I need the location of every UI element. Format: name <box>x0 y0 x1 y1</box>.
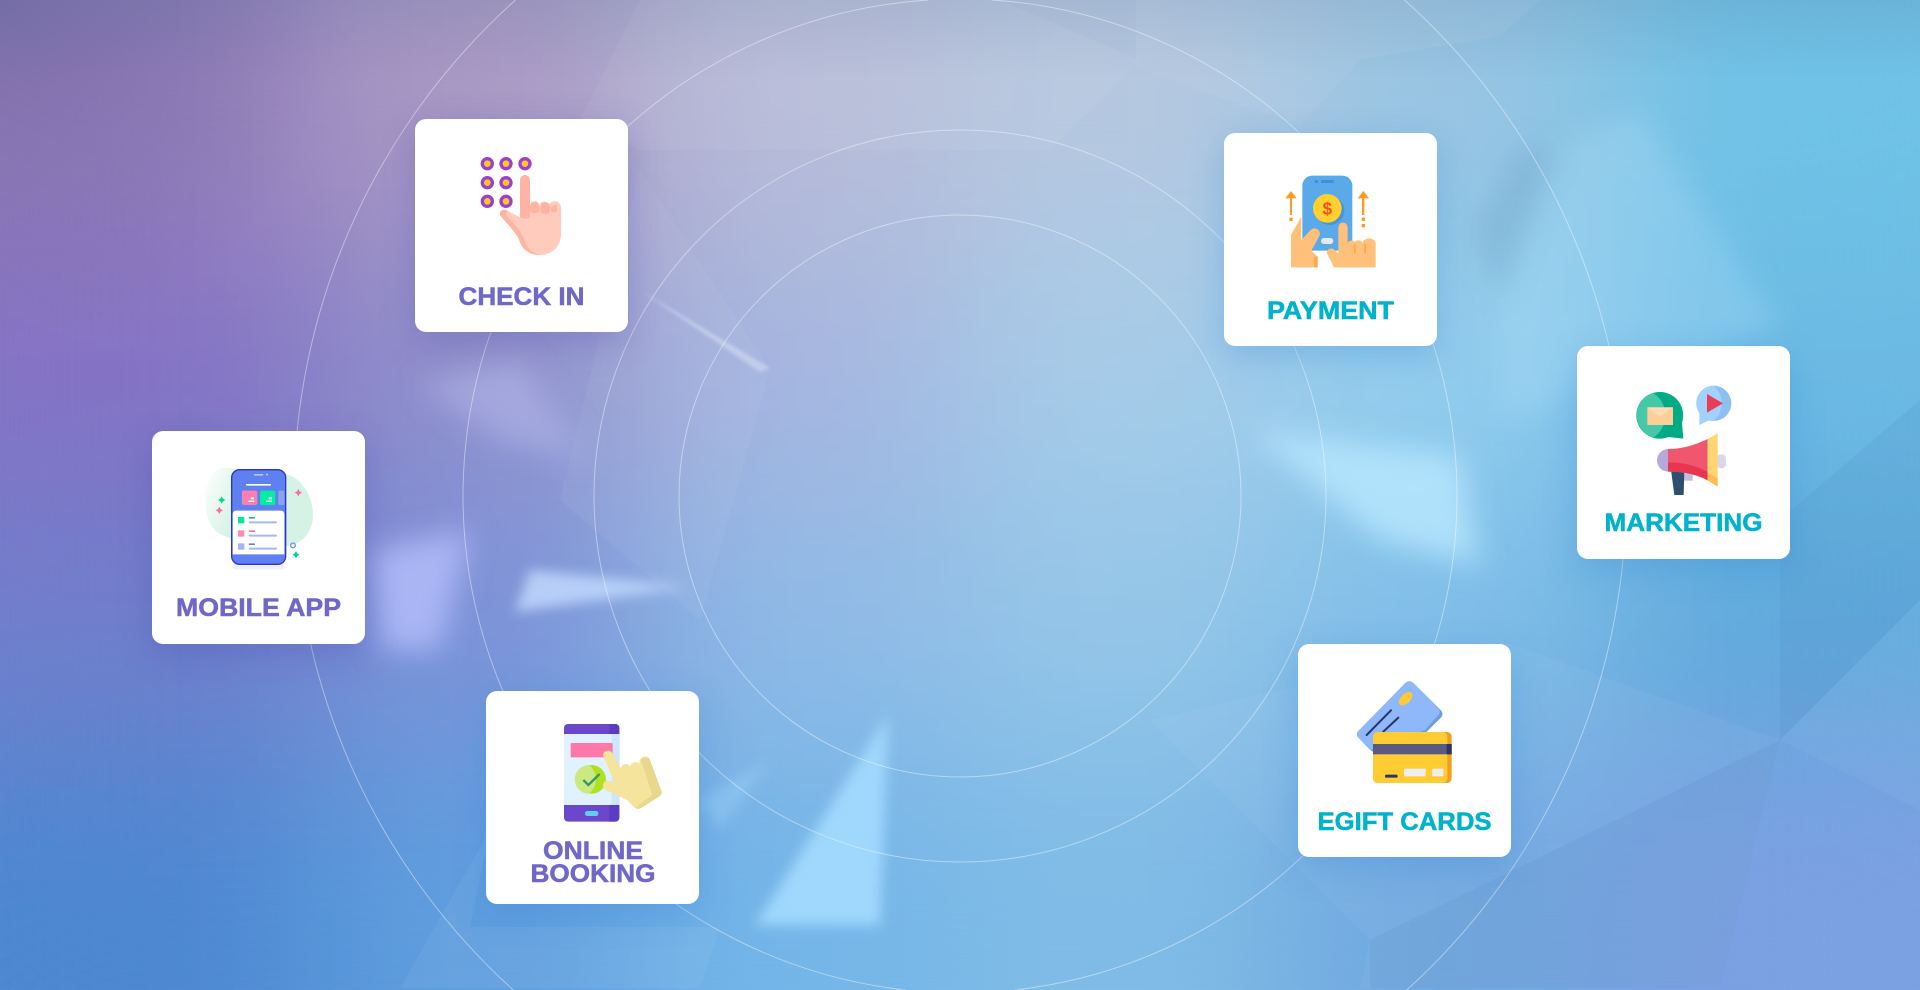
icon: gift cards <box>1357 681 1452 783</box>
panel: marketing <box>1577 346 1790 559</box>
panel: payment <box>1224 133 1437 346</box>
label: ONLINE <box>543 837 643 865</box>
panel: online booking <box>486 691 699 904</box>
icon: phone payment with hands: $ <box>1323 199 1333 219</box>
label: BOOKING <box>530 860 656 888</box>
label: MOBILE APP <box>176 594 341 622</box>
icon: phone payment with hands <box>1285 176 1376 267</box>
label: PAYMENT <box>1267 297 1394 325</box>
icon: phone with booking confirmation and hand <box>564 724 662 822</box>
label: MARKETING <box>1604 509 1762 537</box>
panel: check in <box>415 119 628 332</box>
panel: mobile app <box>152 431 365 644</box>
icon: hand pressing keypad <box>481 157 561 255</box>
label: EGIFT CARDS <box>1318 808 1492 836</box>
icon: megaphone with message bubbles <box>1636 386 1731 495</box>
panel: egift cards <box>1298 644 1511 857</box>
label: CHECK IN <box>458 283 584 311</box>
icon: smartphone app screen <box>205 468 313 569</box>
label <box>530 837 656 888</box>
